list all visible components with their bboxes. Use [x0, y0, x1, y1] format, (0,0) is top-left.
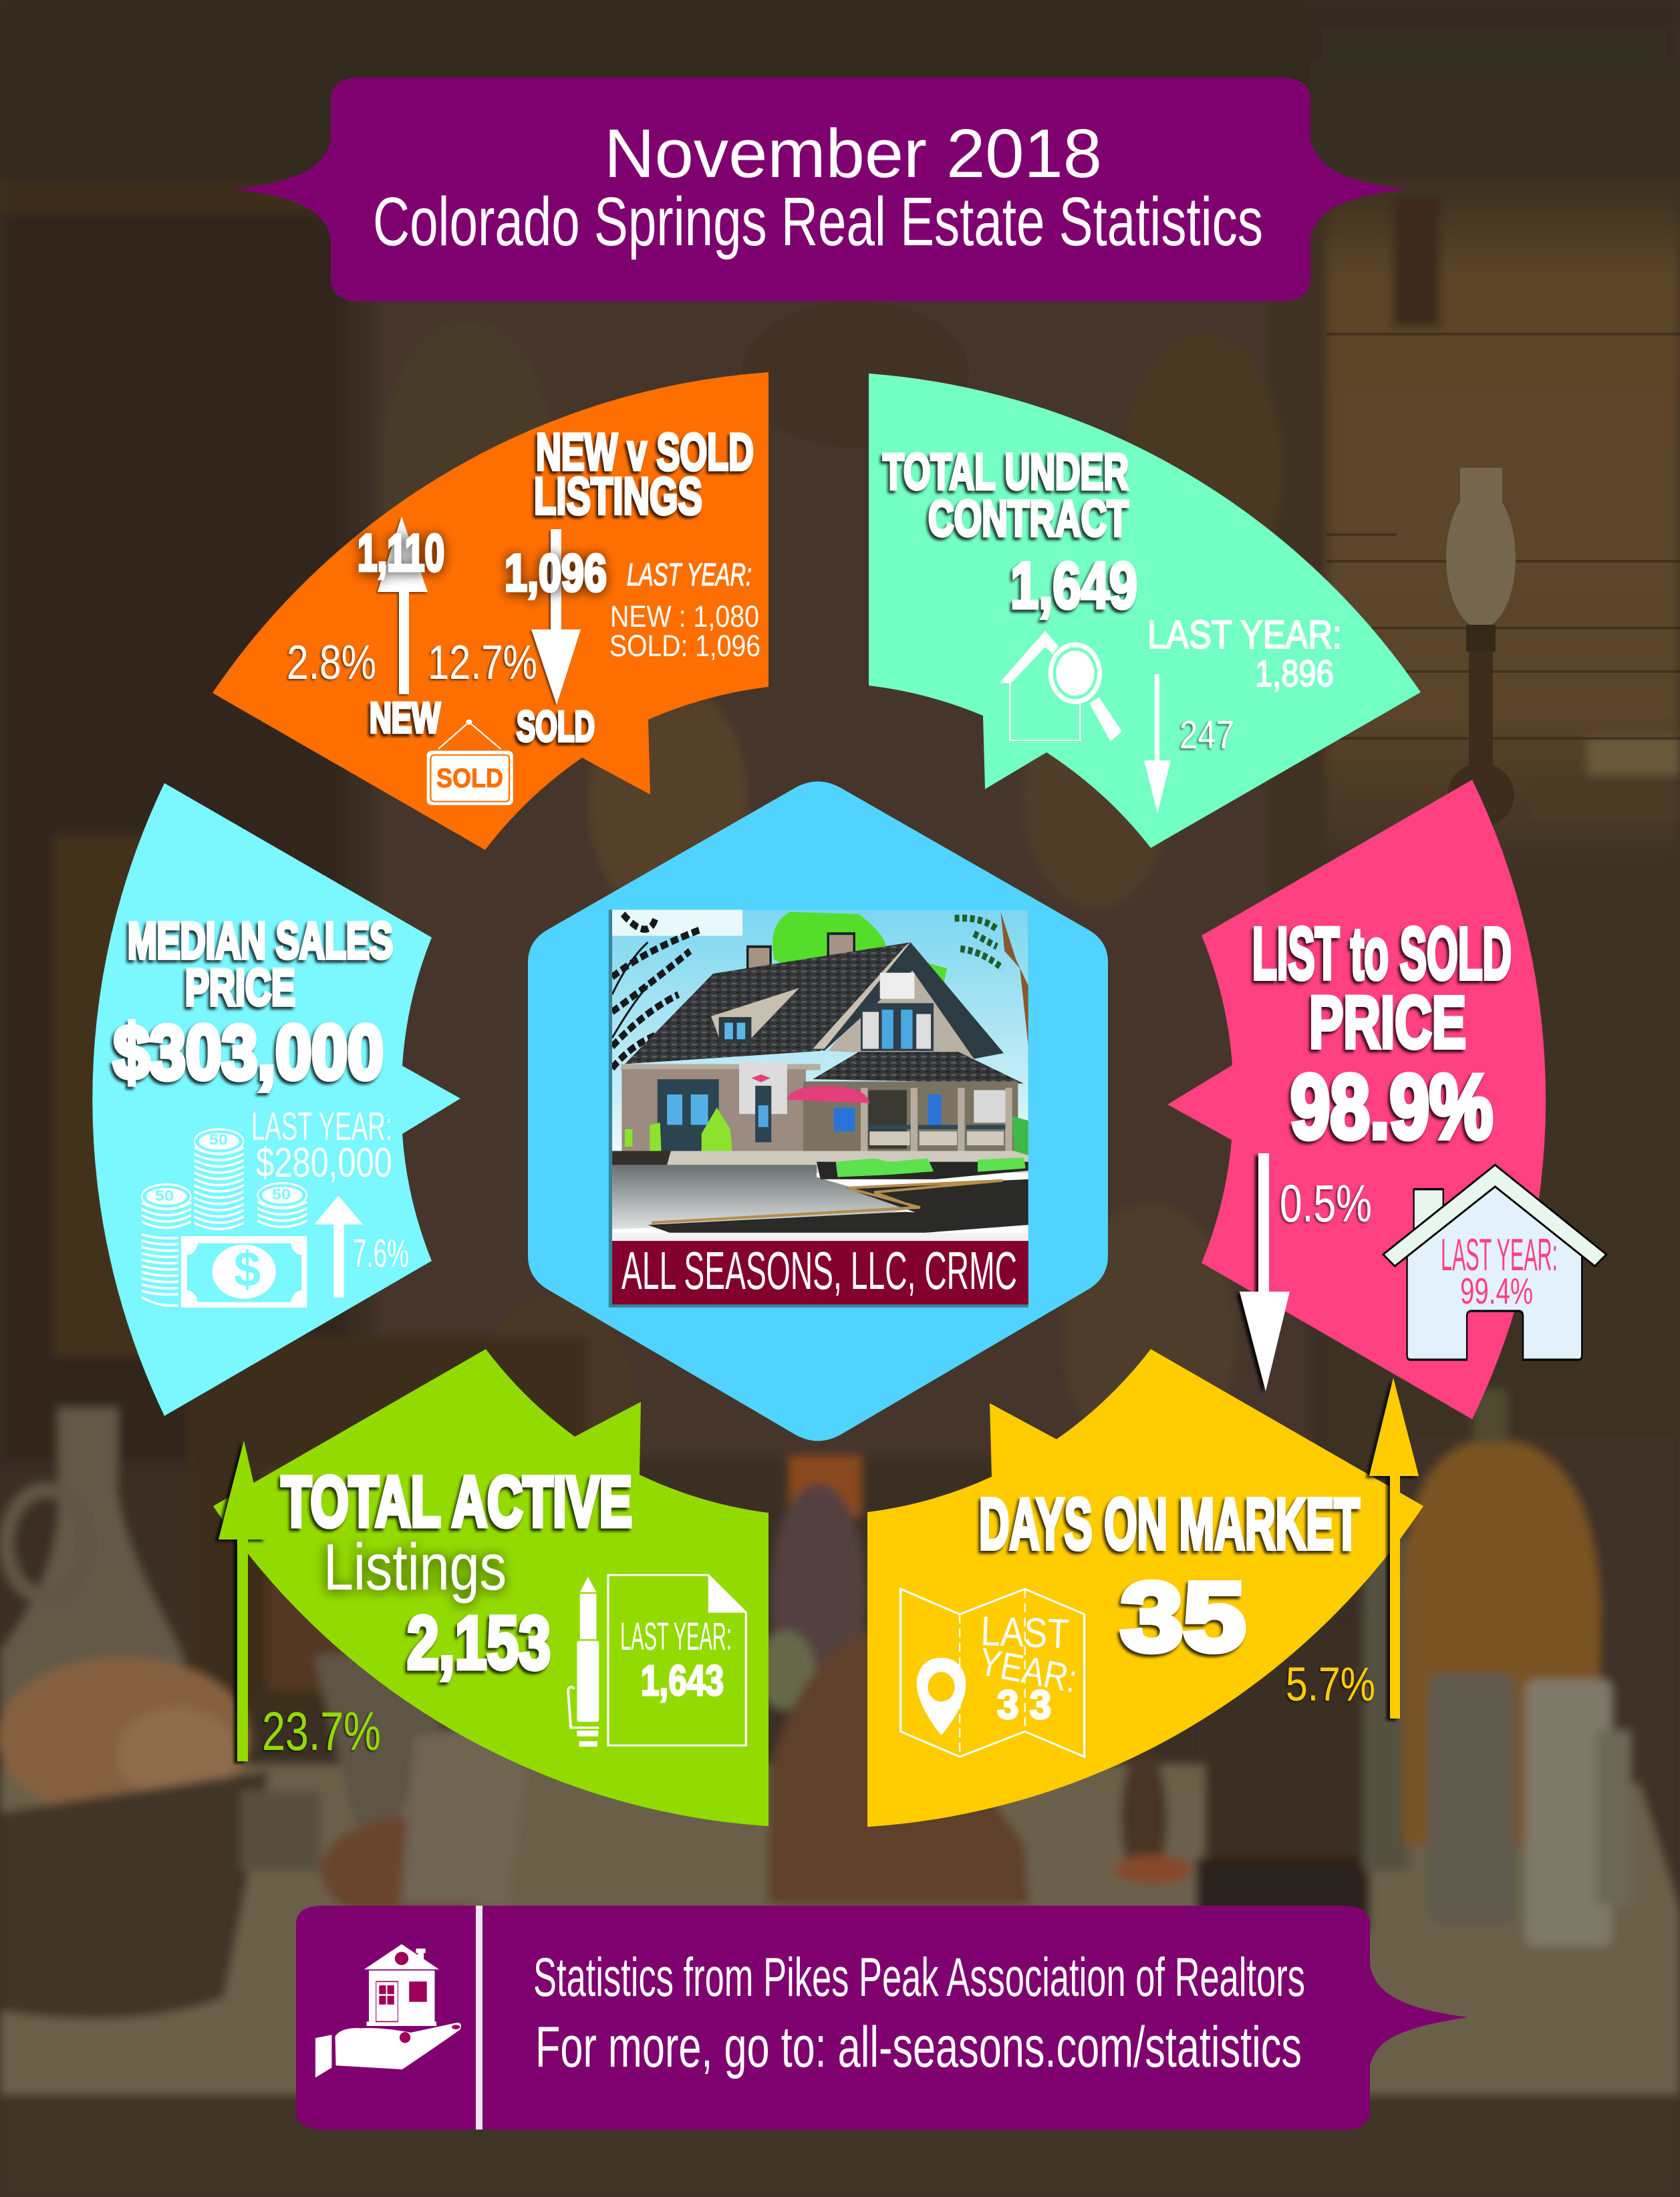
label: new: NEW [370, 694, 440, 742]
panel: median sales price [92, 783, 460, 1416]
map text: year: YEAR: [976, 1640, 1081, 1701]
logo caption: ALL SEASONS, LLC, CRMC [621, 1241, 1017, 1300]
value: $303,000 [114, 1010, 384, 1095]
last year label: LAST YEAR: [251, 1105, 392, 1149]
heading: TOTAL ACTIVE [281, 1461, 632, 1542]
heading: MEDIAN SALES [128, 912, 393, 970]
icon: sold sign: SOLD [436, 764, 503, 793]
arrow: new up [378, 517, 428, 694]
last year label: LAST YEAR: [1147, 613, 1342, 657]
icon: sold sign [427, 720, 513, 805]
value: sold listings: 1,096 [505, 543, 607, 602]
heading: TOTAL UNDER [883, 444, 1129, 500]
value: 98.9% [1290, 1056, 1493, 1157]
last year value: $280,000 [256, 1140, 392, 1186]
icon text: coin values: $ [234, 1241, 261, 1297]
footer banner [296, 1906, 1468, 2130]
value: 35 [1121, 1562, 1246, 1671]
change: 247 [1179, 713, 1234, 757]
change: 7.6% [353, 1231, 409, 1276]
center hexagon with house logo [528, 782, 1108, 1441]
heading: NEW v SOLD [536, 422, 754, 481]
arrow: list to sold down [1240, 1153, 1290, 1391]
icon text: coin values: 50 [209, 1131, 228, 1148]
label: sold: SOLD [517, 702, 595, 750]
title line: subject: Colorado Springs Real Estate Statistics [373, 183, 1263, 260]
icon text: coin values: 50 [272, 1186, 291, 1203]
panel: new v sold listings [213, 372, 768, 850]
value: 1,649 [1010, 549, 1137, 622]
house illustration [609, 909, 1028, 1308]
last year value: 99.4% [1460, 1270, 1533, 1312]
icon: folded map with pin [901, 1589, 1085, 1757]
icon text: coin values [155, 1131, 291, 1297]
value: new listings: 1,110 [358, 523, 444, 582]
icon: house with magnifier [999, 631, 1122, 742]
last year value: 1,896 [1255, 652, 1334, 694]
panel: list to sold price [1167, 780, 1606, 1419]
more info line: For more, go to: all-seasons.com/statistics [535, 2015, 1302, 2079]
title banner [233, 78, 1409, 301]
change: total active: 23.7% [262, 1701, 381, 1762]
heading line 2: PRICE [185, 959, 295, 1016]
icon: pen and document [568, 1575, 746, 1747]
lamp [1446, 468, 1516, 827]
panel: days on market [867, 1349, 1423, 1827]
icon text: coin values: 50 [155, 1187, 174, 1204]
icon: house with last year [1383, 1165, 1606, 1360]
last year label: LAST YEAR: [627, 557, 752, 592]
arrow: days on market up [1369, 1378, 1419, 1719]
title line: date: November 2018 [604, 115, 1102, 192]
change: new: 2.8% [287, 636, 376, 690]
value: 2,153 [407, 1601, 551, 1685]
map text: last: LAST [980, 1608, 1070, 1658]
icon: house on open hand [315, 1944, 461, 2077]
change: sold: 12.7% [428, 636, 537, 690]
heading line 2: LISTINGS [534, 466, 702, 525]
map text: value: 3 3 [997, 1682, 1051, 1727]
arrow: sold down [531, 529, 581, 705]
icon: coins and banknote [142, 1129, 363, 1308]
heading line 2: PRICE [1309, 982, 1466, 1064]
panel: total active listings [213, 1349, 768, 1826]
change: days on market: 5.7% [1286, 1658, 1375, 1711]
last year label: LAST YEAR: [620, 1615, 732, 1658]
panel: total under contract [869, 374, 1421, 848]
arrow: down [1144, 674, 1171, 813]
last year new: NEW : 1,080 [610, 599, 759, 633]
heading line 2: CONTRACT [928, 490, 1129, 547]
heading: DAYS ON MARKET [979, 1483, 1360, 1565]
last year sold: SOLD: 1,096 [609, 629, 760, 663]
arrow: total active up [219, 1441, 267, 1761]
last year value: 1,643 [641, 1656, 724, 1705]
subheading: Listings [323, 1530, 507, 1604]
change: 0.5% [1280, 1173, 1372, 1233]
